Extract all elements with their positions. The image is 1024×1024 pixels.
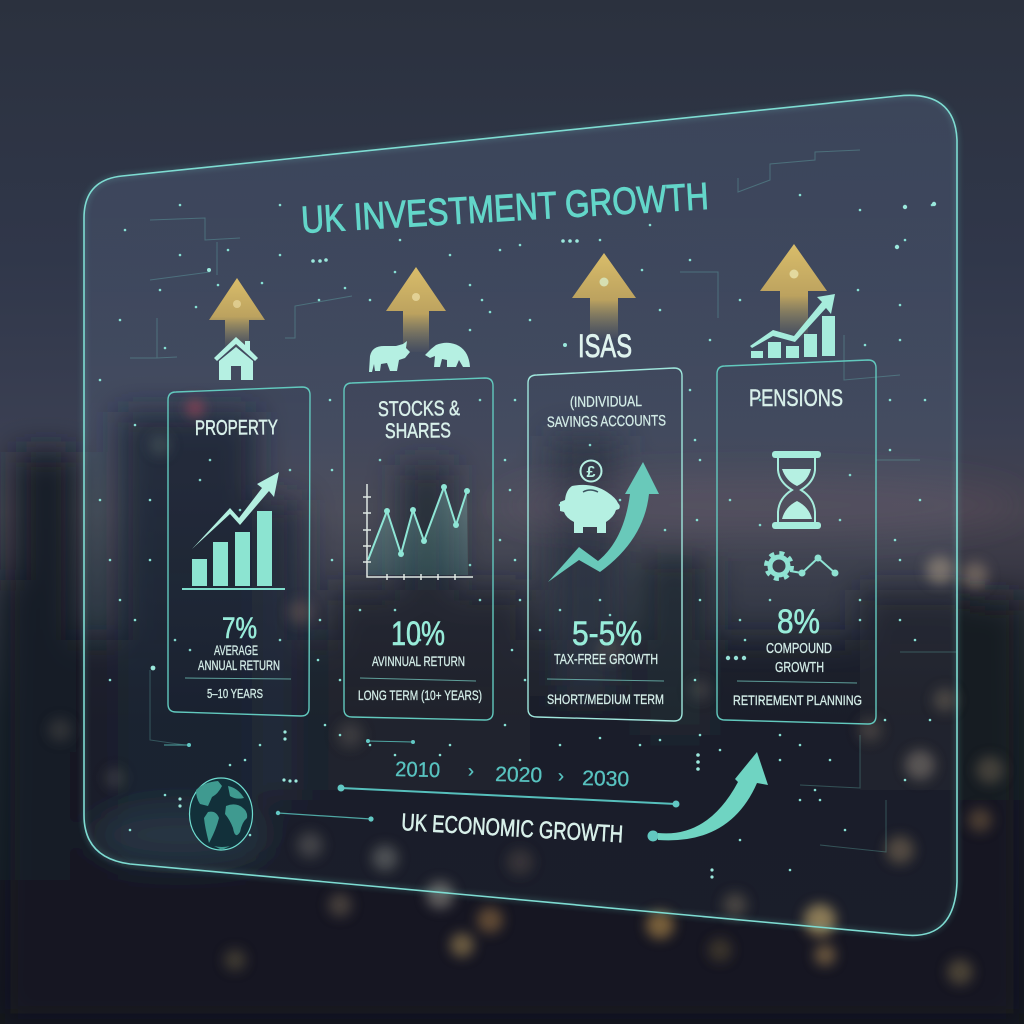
timeline years: [395, 758, 629, 791]
label: UK economic growth: UK ECONOMIC GROWTH: [401, 809, 624, 848]
horizon: 5-10 years: 5–10 YEARS: [207, 686, 263, 701]
stat: 8% compound growth: COMPOUND: [766, 640, 832, 657]
panel: isas: [528, 368, 682, 721]
stat: 7% average annual return: ANNUAL RETURN: [198, 657, 280, 673]
stat: 5-5% tax-free growth: TAX-FREE GROWTH: [554, 651, 658, 668]
arrow: isas gold: [572, 253, 636, 338]
heading: ISAs: ISAS: [578, 328, 632, 364]
arrow: stocks gold: [386, 267, 446, 352]
stat: 5-5% tax-free growth: 5-5%: [572, 615, 642, 653]
icon: piggy bank with pound coin and arrow: £: [587, 464, 596, 481]
connector line: [276, 811, 374, 822]
heading: stocks and shares: SHARES: [385, 419, 451, 443]
stat: 7% average annual return: AVERAGE: [214, 642, 258, 658]
icon: house: [214, 337, 258, 380]
timeline years: 2030: [582, 767, 629, 791]
decorative constellation dots: [100, 195, 932, 870]
stat: 10% annual return: AVINNUAL RETURN: [372, 653, 465, 669]
chart: rising bars with arrow: [182, 472, 285, 589]
timeline years: ›: [558, 766, 564, 786]
heading: individual savings accounts: (INDIVIDUAL: [570, 393, 642, 411]
timeline years: 2010: [395, 758, 440, 782]
stat: 10% annual return: [372, 615, 465, 669]
panel outer glow: [84, 95, 957, 935]
timeline years: 2020: [495, 763, 542, 787]
heading: property: PROPERTY: [195, 416, 278, 440]
panel: property: [168, 387, 310, 716]
stat: 10% annual return: 10%: [391, 615, 445, 653]
stat: 5-5% tax-free growth: [554, 615, 658, 668]
horizon: long term: LONG TERM (10+ YEARS): [358, 687, 482, 703]
background: bokeh city lights: [48, 399, 1004, 985]
bright node dots: [151, 202, 936, 879]
icon: piggy bank with pound coin and arrow: [548, 460, 659, 582]
title: UK INVESTMENT GROWTH: [300, 176, 710, 242]
heading: stocks and shares: [378, 397, 460, 443]
chart: line chart: [363, 484, 473, 580]
icon: bull and bear: [369, 341, 470, 372]
timeline years: ›: [468, 761, 474, 781]
decorative circuit traces: [130, 150, 957, 852]
small connector lines: [164, 739, 415, 747]
stat: 8% compound growth: 8%: [777, 603, 820, 641]
heading: individual savings accounts: SAVINGS ACCOUNTS: [547, 412, 666, 431]
heading: individual savings accounts: [547, 393, 666, 431]
arrow: pensions gold: [760, 244, 827, 338]
heading: pensions: PENSIONS: [749, 385, 843, 412]
horizon: retirement planning: RETIREMENT PLANNING: [733, 692, 862, 708]
glass panel: [84, 95, 957, 935]
stat: 8% compound growth: GROWTH: [775, 659, 824, 676]
icon: hourglass: [772, 451, 821, 529]
horizon: short medium term: SHORT/MEDIUM TERM: [547, 691, 664, 707]
heading: stocks and shares: STOCKS &: [378, 397, 460, 421]
panel: pensions: [717, 360, 876, 724]
icon: globe: [190, 778, 252, 850]
icon: growth chart above pensions: [750, 294, 835, 358]
stat: 7% average annual return: [198, 612, 280, 673]
panel glass body: [84, 95, 957, 935]
background: blurred city skyline: [0, 412, 1024, 1024]
arrow: economic growth curve: [648, 752, 768, 842]
panel: stocks and shares: [344, 378, 493, 720]
icon: gear and compound line: [766, 553, 838, 579]
arrow: property gold: [209, 278, 265, 348]
timeline line: [338, 784, 680, 808]
stat: 7% average annual return: 7%: [222, 612, 257, 645]
stat: 8% compound growth: [766, 603, 832, 676]
